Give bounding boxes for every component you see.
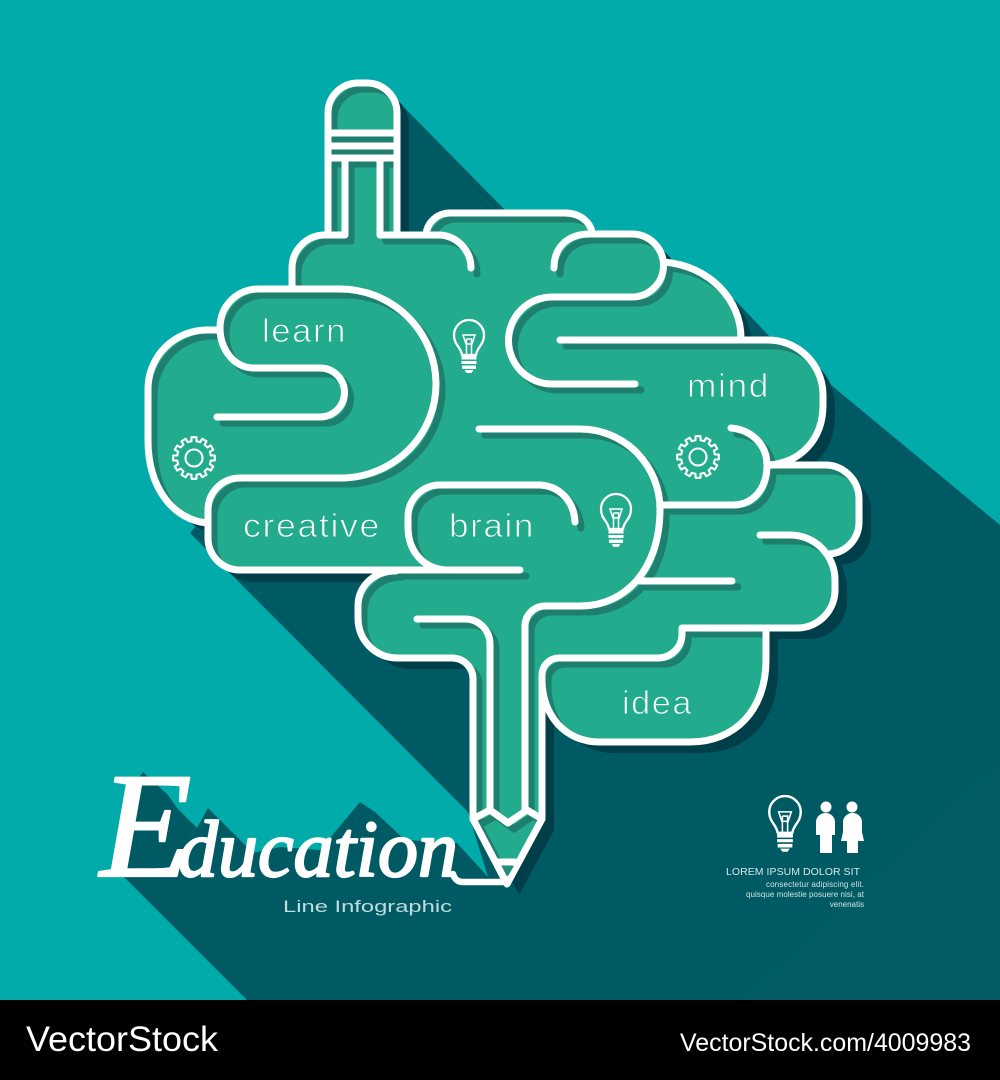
near shadow of brain [160, 94, 871, 895]
label: idea: idea [622, 684, 693, 721]
eraser band fill [328, 133, 397, 158]
pencil lead tip [502, 866, 514, 876]
subtitle: Line Infographic [283, 897, 453, 916]
icon: gear right [677, 436, 719, 478]
caption body: quisque molestie posuere nisi, at [746, 890, 865, 899]
label: mind: mind [687, 367, 770, 404]
icon: female figure [841, 802, 864, 853]
label: learn: learn [262, 312, 347, 349]
caption body [746, 880, 865, 909]
long shadow of brain [190, 88, 1000, 1000]
icon: male figure [816, 802, 835, 853]
caption heading: LOREM IPSUM DOLOR SIT [726, 866, 861, 878]
title: Education: ducation [178, 806, 458, 894]
icon: light bulb top [454, 320, 484, 373]
footer bar [0, 1000, 1000, 1080]
icon: light bulb small [769, 796, 801, 852]
long shadow of lettering [117, 772, 560, 1000]
caption body: venenatis [830, 900, 864, 909]
icon: gear left [173, 437, 215, 479]
caption body: consectetur adipiscing elit. [766, 880, 864, 889]
title: Education: E [98, 743, 192, 909]
white brain and pencil outline [148, 83, 859, 884]
label: brain: brain [449, 507, 535, 544]
inner line shadows [154, 89, 865, 890]
label: creative: creative [243, 507, 381, 544]
icon: light bulb lower [601, 494, 631, 547]
brain pencil body [148, 83, 859, 884]
title underline into pencil [453, 874, 507, 882]
footer image id: VectorStock.com/4009983 [680, 1029, 971, 1057]
footer logo text: VectorStock [26, 1020, 219, 1059]
